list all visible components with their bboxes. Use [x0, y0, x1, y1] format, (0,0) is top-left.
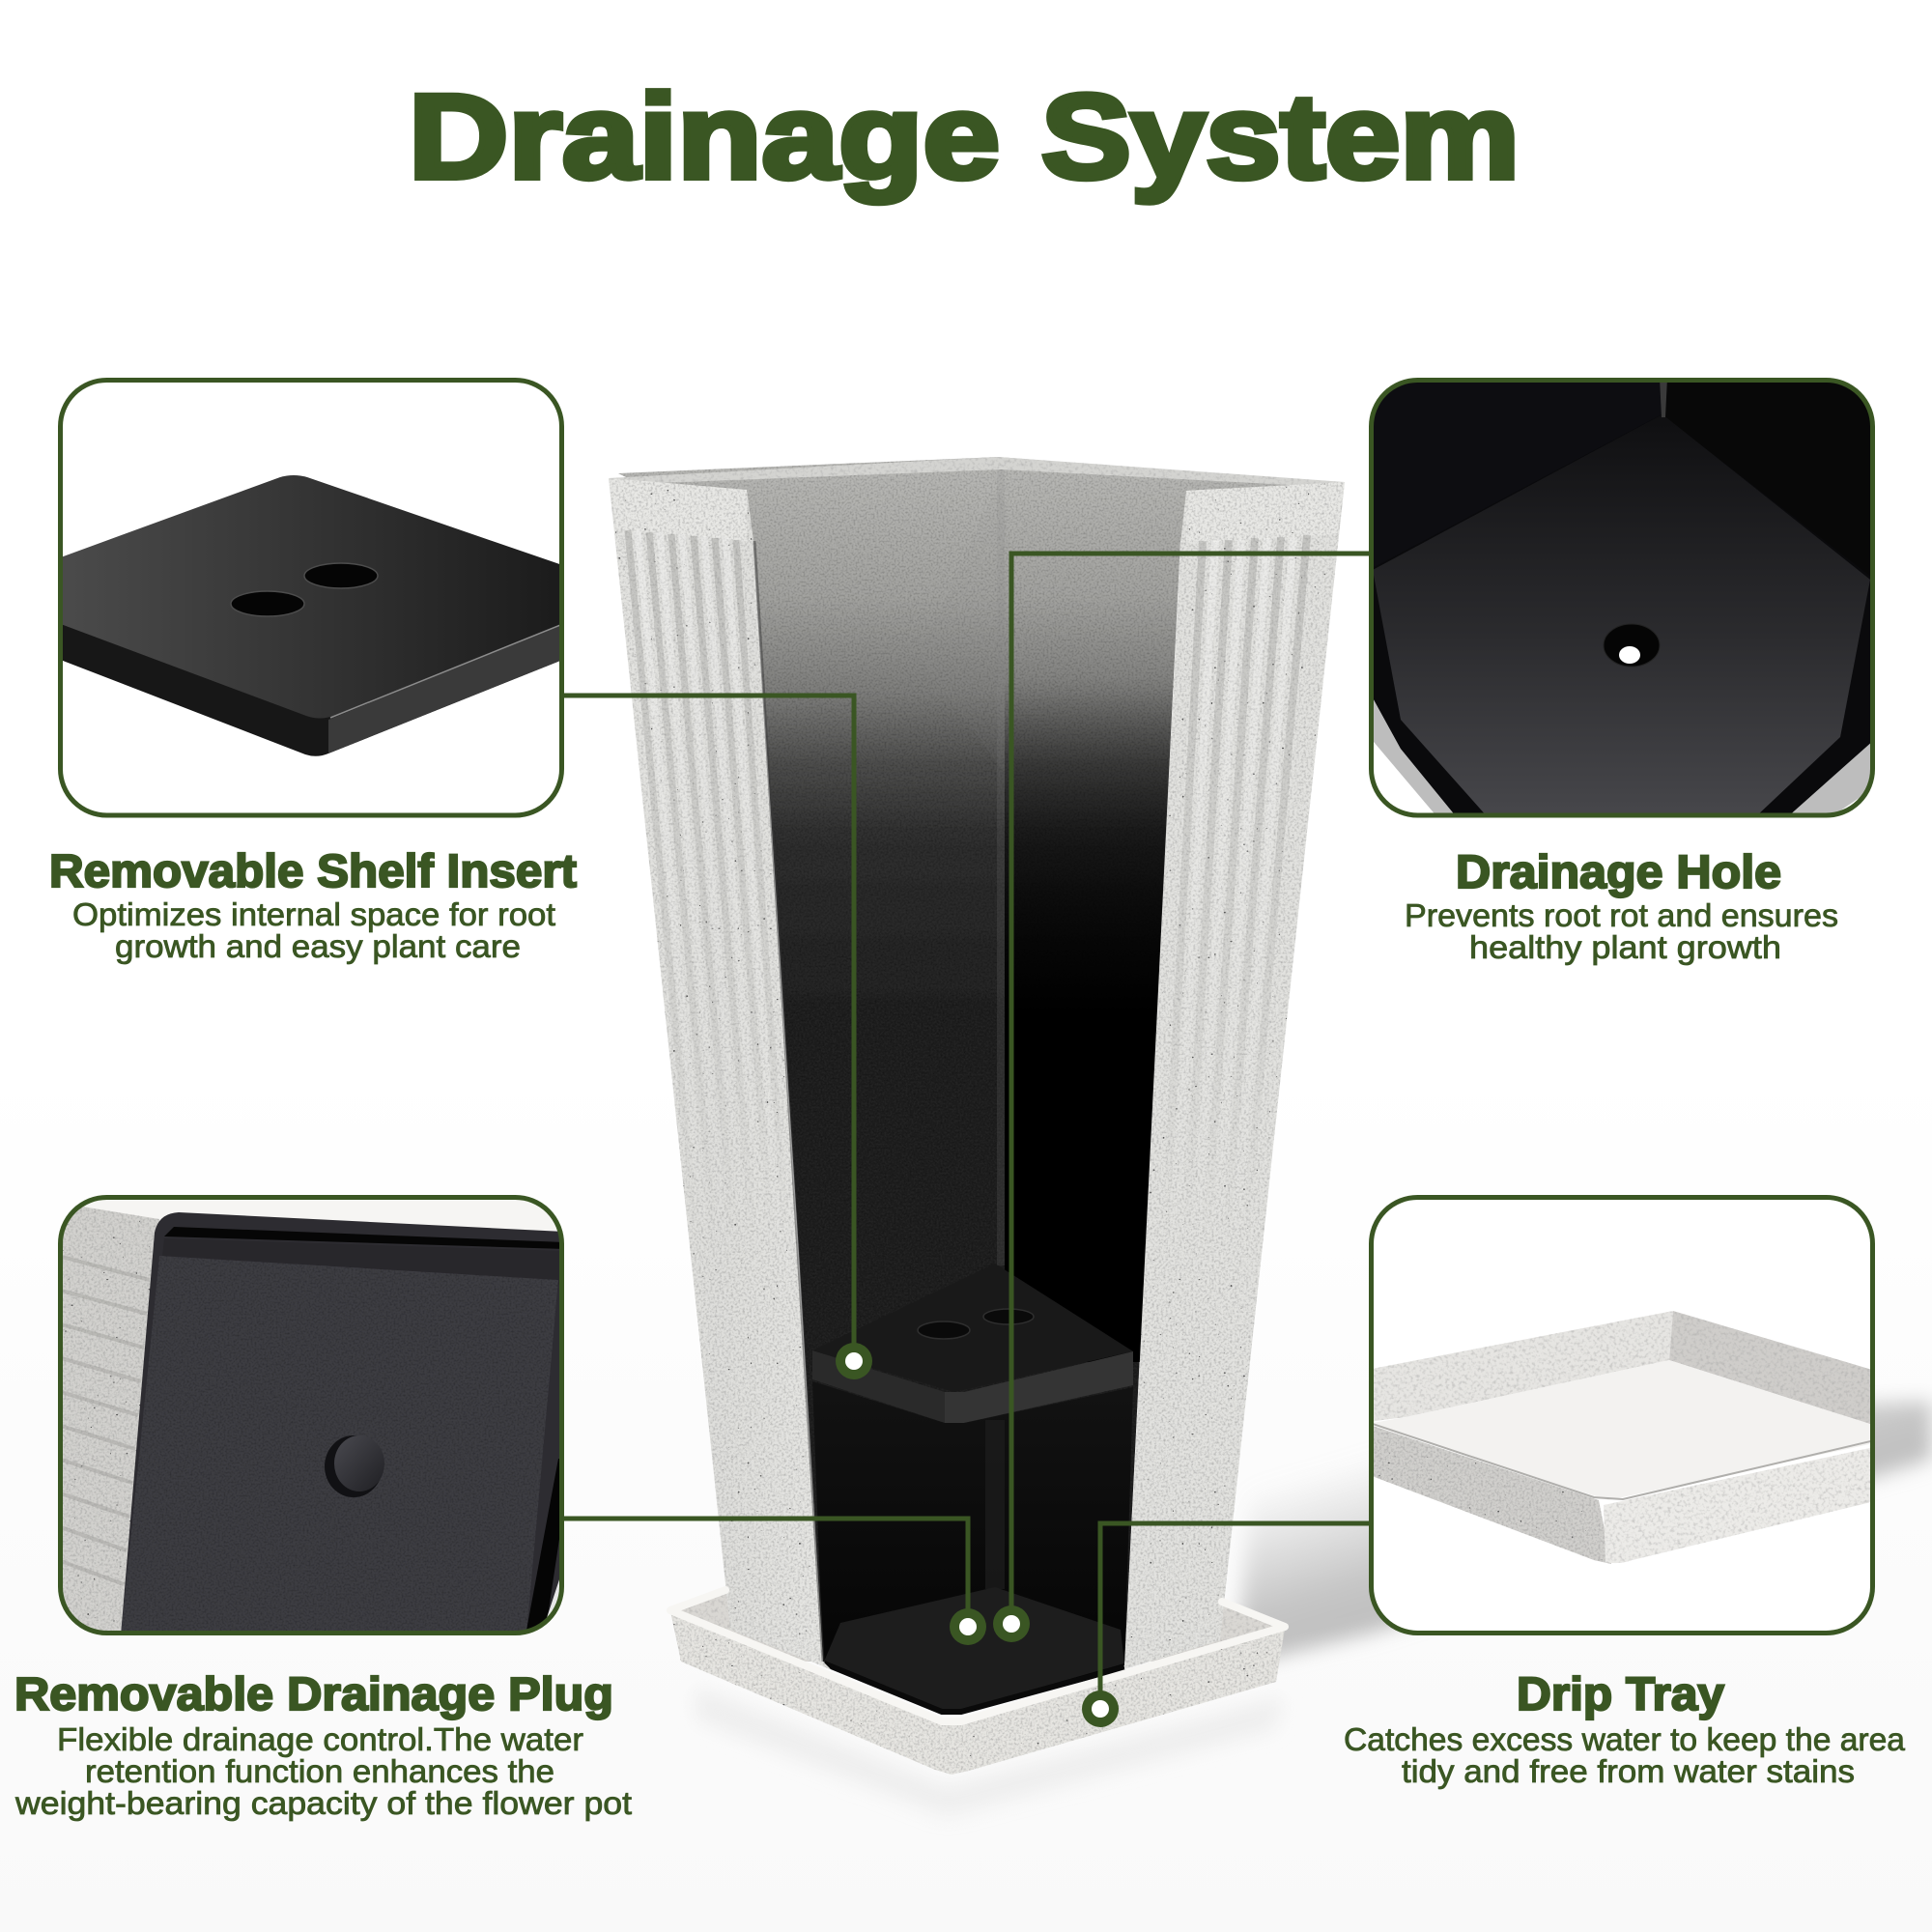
text: removable shelf insert — [49, 846, 577, 964]
panel: drip tray — [1367, 1195, 1879, 1634]
text: drainage hole — [1405, 847, 1838, 965]
callout line: drainage plug — [562, 1519, 986, 1645]
text: drainage hole: healthy plant growth — [1469, 929, 1781, 965]
back interior — [618, 457, 1333, 1712]
shelf plate — [58, 475, 565, 756]
lower interior and floor — [812, 1381, 1133, 1712]
text: removable drainage plug — [14, 1669, 632, 1821]
text: removable shelf insert: Optimizes internal space for root — [72, 896, 555, 932]
panel: removable shelf insert — [58, 378, 565, 817]
shelf insert — [812, 1264, 1133, 1423]
text: drip tray: Catches excess water to keep the area — [1344, 1721, 1906, 1757]
text: drainage hole: Prevents root rot and ensures — [1405, 897, 1838, 933]
right wall — [1124, 482, 1345, 1669]
stone edge — [58, 1203, 159, 1635]
text: removable drainage plug: weight-bearing capacity of the flower pot — [14, 1785, 632, 1821]
text: removable drainage plug: Removable Drainage Plug — [14, 1669, 613, 1720]
tray — [1367, 1311, 1879, 1564]
text: drip tray: tidy and free from water stains — [1402, 1753, 1855, 1789]
text: drip tray — [1344, 1669, 1906, 1789]
text: drainage hole: Drainage Hole — [1456, 847, 1781, 898]
plug button — [325, 1435, 384, 1497]
callout line: drip tray — [1082, 1523, 1371, 1727]
left wall — [609, 478, 831, 1669]
callout line: shelf insert — [562, 696, 872, 1379]
title — [409, 71, 1520, 204]
planter cutaway illustration — [609, 457, 1345, 1775]
drip tray front — [670, 1590, 1285, 1775]
title: System — [1041, 71, 1520, 204]
drip tray inside — [668, 1588, 1287, 1662]
panel: drainage hole — [1369, 378, 1875, 817]
pot floor — [1373, 414, 1870, 817]
text: removable shelf insert: growth and easy plant care — [115, 928, 521, 964]
text: removable drainage plug: retention function enhances the — [85, 1753, 554, 1789]
text: drip tray: Drip Tray — [1517, 1669, 1724, 1720]
panel: removable drainage plug — [58, 1195, 564, 1635]
plug recess — [121, 1212, 564, 1635]
text: removable shelf insert: Removable Shelf Insert — [49, 846, 577, 897]
callout line: drainage hole — [993, 554, 1371, 1642]
hole — [1604, 624, 1660, 667]
title: Drainage — [409, 71, 1000, 204]
white corners — [1374, 699, 1453, 813]
text: removable drainage plug: Flexible drainage control.The water — [57, 1721, 583, 1757]
